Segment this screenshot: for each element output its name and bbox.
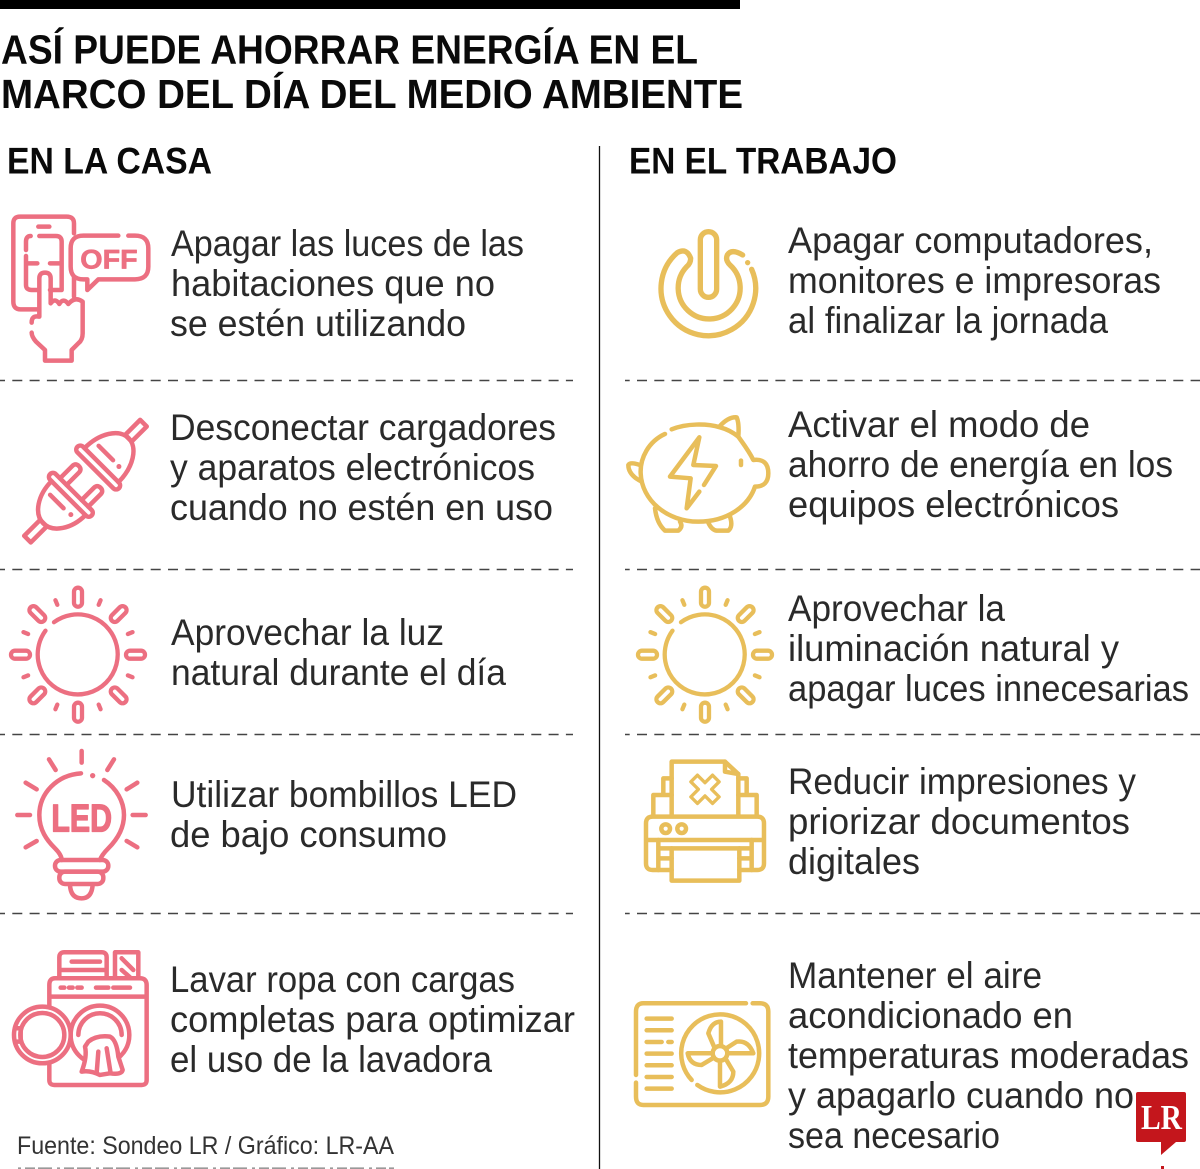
text: bombillos [170, 774, 517, 855]
icon: air conditioner [636, 1003, 768, 1105]
text: desconectar: cuando no estén en uso [170, 487, 553, 528]
text: apagar luces: se estén utilizando [170, 303, 466, 344]
text: lavar ropa: Lavar ropa con cargas [170, 959, 515, 1000]
text: aire acondicionado: sea necesario [788, 1115, 1000, 1156]
text: aire acondicionado [788, 955, 1189, 1156]
icon: led bulb: LED [51, 797, 112, 840]
text: reducir impresiones: Reducir impresiones y [788, 761, 1136, 802]
text: iluminacion natural: Aprovechar la [788, 588, 1005, 629]
icon: light switch off: OFF [80, 245, 138, 275]
text: iluminacion natural: iluminación natural y [788, 628, 1119, 669]
text: apagar luces: Apagar las luces de las [171, 223, 524, 264]
icon: piggy bank with bolt [628, 417, 768, 531]
text: lavar ropa: el uso de la lavadora [170, 1039, 492, 1080]
text: modo ahorro: Activar el modo de [788, 404, 1090, 445]
panel: en el trabajo [628, 140, 1189, 1156]
text: luz natural [171, 612, 506, 693]
text: luz natural: natural durante el día [171, 652, 506, 693]
text: apagar computadores [788, 220, 1161, 341]
text: lavar ropa [170, 959, 575, 1080]
text: apagar computadores: al finalizar la jornada [788, 300, 1108, 341]
text: desconectar [170, 407, 556, 528]
text: apagar computadores: Apagar computadores, [788, 220, 1153, 261]
text: aire acondicionado: acondicionado en [788, 995, 1073, 1036]
text: iluminacion natural [788, 588, 1189, 709]
logo: LR [1136, 1092, 1186, 1169]
text: reducir impresiones: digitales [788, 841, 920, 882]
icon: power button [661, 232, 756, 336]
panel: en la casa [6, 140, 575, 1085]
icon: washing machine [14, 952, 147, 1085]
text: modo ahorro: ahorro de energía en los [788, 444, 1173, 485]
text: apagar computadores: monitores e impresoras [788, 260, 1161, 301]
title [1, 26, 743, 117]
text: aire acondicionado: y apagarlo cuando no [788, 1075, 1134, 1116]
text: luz natural: Aprovechar la luz [171, 612, 444, 653]
heading: en la casa: EN LA CASA [7, 140, 212, 182]
icon: sun [638, 588, 772, 722]
text: aire acondicionado: Mantener el aire [788, 955, 1042, 996]
text: bombillos: Utilizar bombillos LED [171, 774, 517, 815]
text: modo ahorro [788, 404, 1173, 525]
heading: en el trabajo: EN EL TRABAJO [629, 140, 897, 182]
source: Fuente: Sondeo LR / Gráfico: LR-AA [17, 1132, 394, 1160]
icon: sun [11, 588, 145, 722]
icon: light switch off [13, 217, 148, 361]
text: aire acondicionado: temperaturas moderadas [788, 1035, 1189, 1076]
text: desconectar: y aparatos electrónicos [170, 447, 535, 488]
text: modo ahorro: equipos electrónicos [788, 484, 1119, 525]
text: lavar ropa: completas para optimizar [170, 999, 575, 1040]
icon: printer [646, 762, 764, 881]
text: apagar luces [170, 223, 524, 344]
text: apagar luces: habitaciones que no [171, 263, 495, 304]
text: bombillos: de bajo consumo [170, 814, 447, 855]
text: reducir impresiones: priorizar documentos [788, 801, 1130, 842]
text: reducir impresiones [788, 761, 1136, 882]
icon: plugs [6, 402, 164, 559]
icon: led bulb [17, 751, 146, 898]
logo: LR: LR [1141, 1098, 1183, 1137]
title: ASÍ PUEDE AHORRAR ENERGÍA EN EL [1, 26, 698, 72]
text: desconectar: Desconectar cargadores [170, 407, 556, 448]
title: MARCO DEL DÍA DEL MEDIO AMBIENTE [1, 71, 743, 117]
